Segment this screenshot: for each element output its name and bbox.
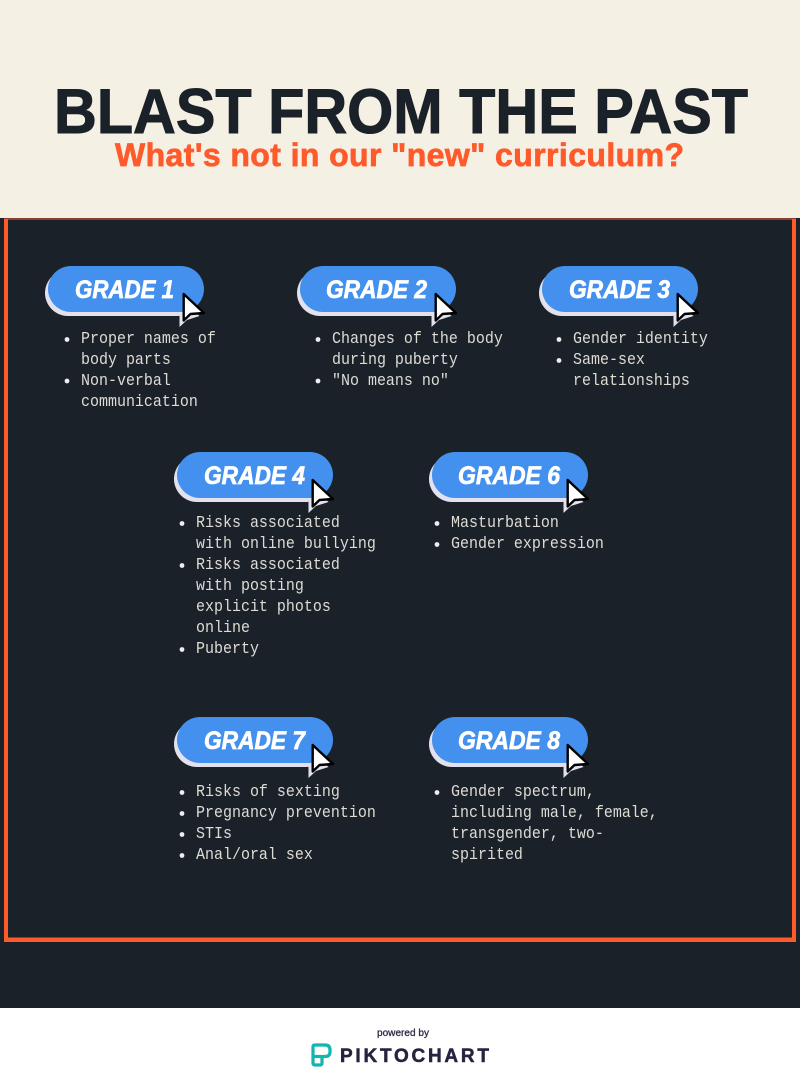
panel: grade 4: Risks associated (196, 513, 340, 533)
panel: grade 4 (174, 452, 376, 659)
panel: grade 1: body parts (81, 350, 171, 370)
panel: grade 4: with online bullying (196, 534, 376, 554)
panel: grade 7: Risks of sexting (196, 782, 340, 802)
panel: grade 3: Gender identity (573, 329, 708, 349)
panel: grade 4: GRADE 4 (204, 462, 305, 490)
panel: grade 1: Non-verbal (81, 371, 171, 391)
panel: grade 8: GRADE 8 (458, 727, 560, 755)
panel: grade 7 (174, 717, 376, 865)
panel: grade 8: transgender, two- (451, 824, 604, 844)
title: BLAST FROM THE PAST (54, 77, 748, 147)
panel: grade 8: Gender spectrum, (451, 782, 595, 802)
panel: grade 7: Pregnancy prevention (196, 803, 376, 823)
panel: grade 2: "No means no" (332, 371, 449, 391)
panel: grade 6: Gender expression (451, 534, 604, 554)
panel: grade 2: Changes of the body (332, 329, 503, 349)
footer band (0, 1008, 800, 1088)
panel: grade 2: during puberty (332, 350, 458, 370)
panel: grade 4: Puberty (196, 639, 259, 659)
panel: grade 1 (45, 266, 216, 412)
panel: grade 4: online (196, 618, 250, 638)
footer credit: powered by (377, 1028, 429, 1039)
panel: grade 8 (429, 717, 658, 865)
panel: grade 6: GRADE 6 (458, 462, 561, 490)
panel: grade 4: Risks associated (196, 555, 340, 575)
panel: grade 2 (297, 266, 503, 391)
icon: piktochart logo (313, 1045, 330, 1065)
panel: grade 8: including male, female, (451, 803, 658, 823)
panel: grade 2: GRADE 2 (326, 276, 427, 304)
orange frame (4, 218, 796, 942)
panel: grade 8: spirited (451, 845, 523, 865)
panel: grade 7: STIs (196, 824, 232, 844)
panel: grade 1: communication (81, 392, 198, 412)
dark background panel (0, 218, 800, 1008)
panel: grade 1: Proper names of (81, 329, 216, 349)
panel: grade 7: Anal/oral sex (196, 845, 313, 865)
panel: grade 1: GRADE 1 (75, 276, 174, 304)
panel: grade 3: GRADE 3 (569, 276, 670, 304)
footer credit: PIKTOCHART (340, 1046, 489, 1067)
panel: grade 3: Same-sex (573, 350, 645, 370)
footer credit (313, 1028, 489, 1067)
header band (0, 0, 800, 218)
subtitle: What's not in our "new" curriculum? (115, 137, 684, 173)
panel: grade 6: Masturbation (451, 513, 559, 533)
panel: grade 3 (539, 266, 708, 391)
panel: grade 4: with posting (196, 576, 304, 596)
panel: grade 4: explicit photos (196, 597, 331, 617)
panel: grade 6 (429, 452, 604, 554)
panel: grade 7: GRADE 7 (204, 727, 306, 755)
panel: grade 3: relationships (573, 371, 690, 391)
